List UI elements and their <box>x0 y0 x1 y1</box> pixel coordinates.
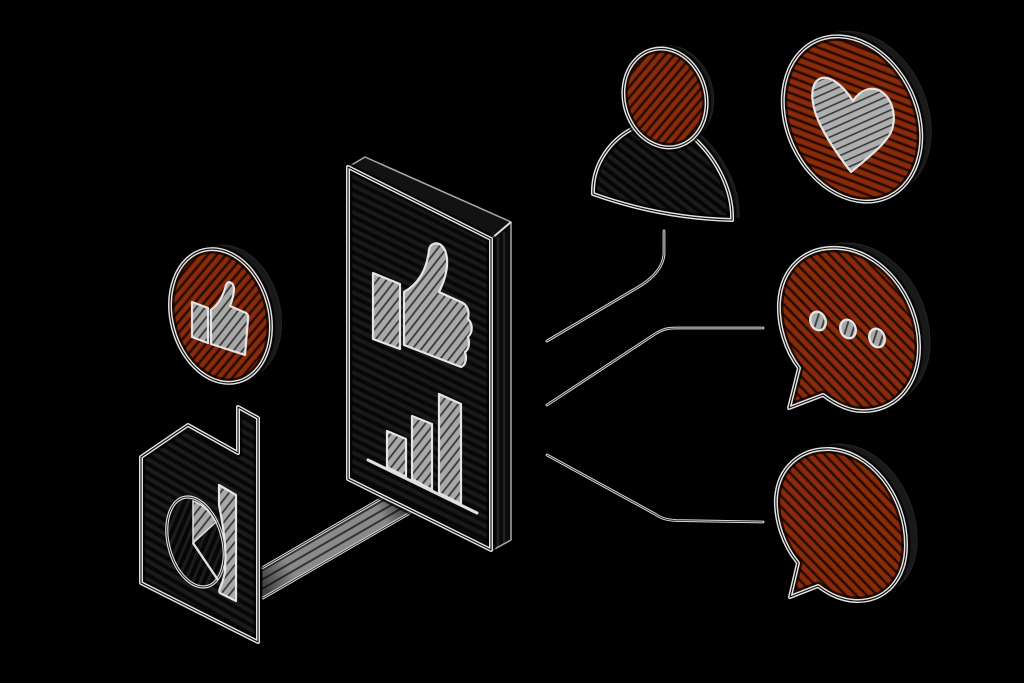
icon: empty chat bubble <box>776 444 917 601</box>
document sheet <box>141 407 258 642</box>
arrow: line to chat bubble with dots <box>547 328 763 405</box>
board front face <box>348 167 491 550</box>
bar chart <box>368 394 477 513</box>
three dots <box>808 310 887 349</box>
connector: document to board <box>262 498 412 600</box>
icon: heart badge <box>757 9 957 224</box>
panel: analytics board <box>348 157 511 551</box>
arrow: line to person <box>547 231 664 341</box>
document side bar <box>219 485 236 601</box>
person body <box>593 123 739 220</box>
icon: person <box>593 36 739 220</box>
panel: pie chart document <box>141 407 258 642</box>
person head <box>612 36 725 157</box>
icon: large thumbs up <box>373 243 472 367</box>
icon: chat bubble with dots <box>779 243 930 411</box>
board side and top faces <box>348 157 511 551</box>
icon: small thumbs up badge <box>156 234 296 394</box>
pie chart <box>158 491 233 593</box>
arrow: line to empty chat bubble <box>547 455 763 522</box>
